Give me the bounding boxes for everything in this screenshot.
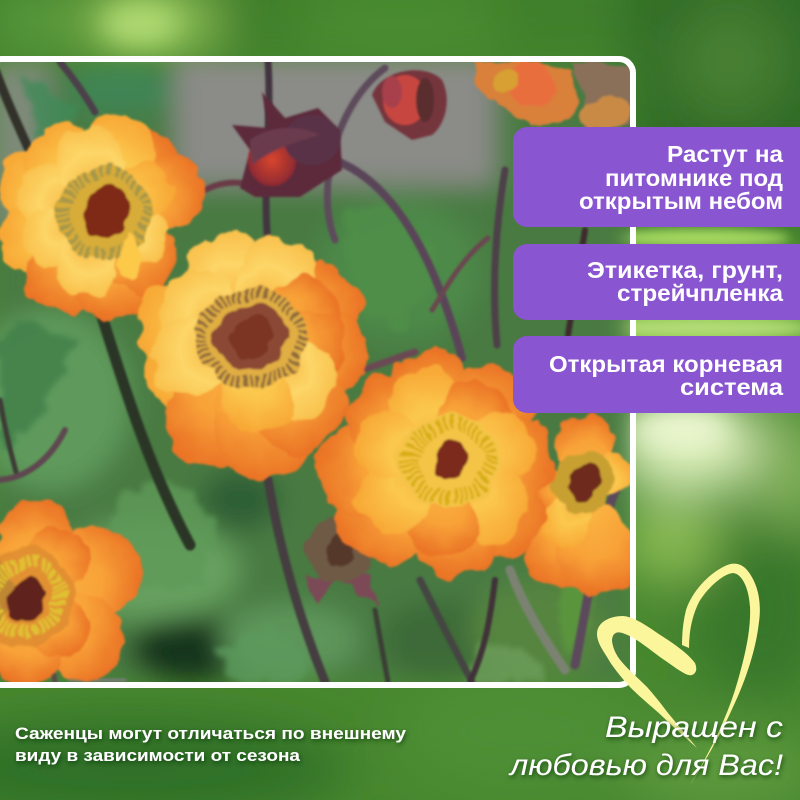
label text: open root system: система	[680, 374, 783, 400]
panel: plant photo	[0, 55, 643, 695]
icon: hand-drawn yellow heart	[597, 564, 760, 785]
flower: faded seed head	[305, 514, 380, 608]
flower: center orange yellow	[130, 220, 375, 485]
flower: bottom left	[0, 498, 145, 682]
photo white frame	[0, 59, 633, 685]
disclaimer text: виду в зависимости от сезона	[15, 746, 301, 765]
label text: packaging: Этикетка, грунт,	[587, 257, 783, 283]
flower bud: dark red	[232, 92, 342, 197]
slogan: grown with love: Выращен с	[605, 711, 783, 744]
label text: grown outdoors: Растут на	[667, 141, 783, 167]
panel: grown outdoors	[513, 127, 800, 227]
slogan: grown with love	[508, 711, 784, 782]
label text: open root system	[549, 351, 783, 400]
label text: grown outdoors: питомнике под	[605, 165, 783, 191]
flower: upper left yellow	[0, 105, 215, 328]
leaves	[0, 70, 590, 682]
flower: top right orange	[470, 61, 633, 128]
label text: open root system: Открытая корневая	[549, 351, 783, 377]
panel: open root system	[513, 336, 800, 413]
disclaimer text: Саженцы могут отличаться по внешнему	[15, 724, 407, 743]
label text: packaging: стрейчпленка	[617, 280, 783, 306]
flower bud: red top	[372, 70, 447, 140]
flower: lower right orange	[315, 343, 563, 585]
panel: packaging	[513, 244, 800, 320]
disclaimer text	[15, 724, 407, 765]
stems	[0, 62, 626, 682]
label text: grown outdoors: открытым небом	[579, 188, 783, 214]
flower: right lower	[522, 413, 630, 598]
slogan: grown with love: любовью для Вас!	[508, 749, 784, 782]
label text: grown outdoors	[579, 141, 783, 214]
label text: packaging	[587, 257, 783, 306]
photo backdrop foliage	[0, 55, 630, 682]
